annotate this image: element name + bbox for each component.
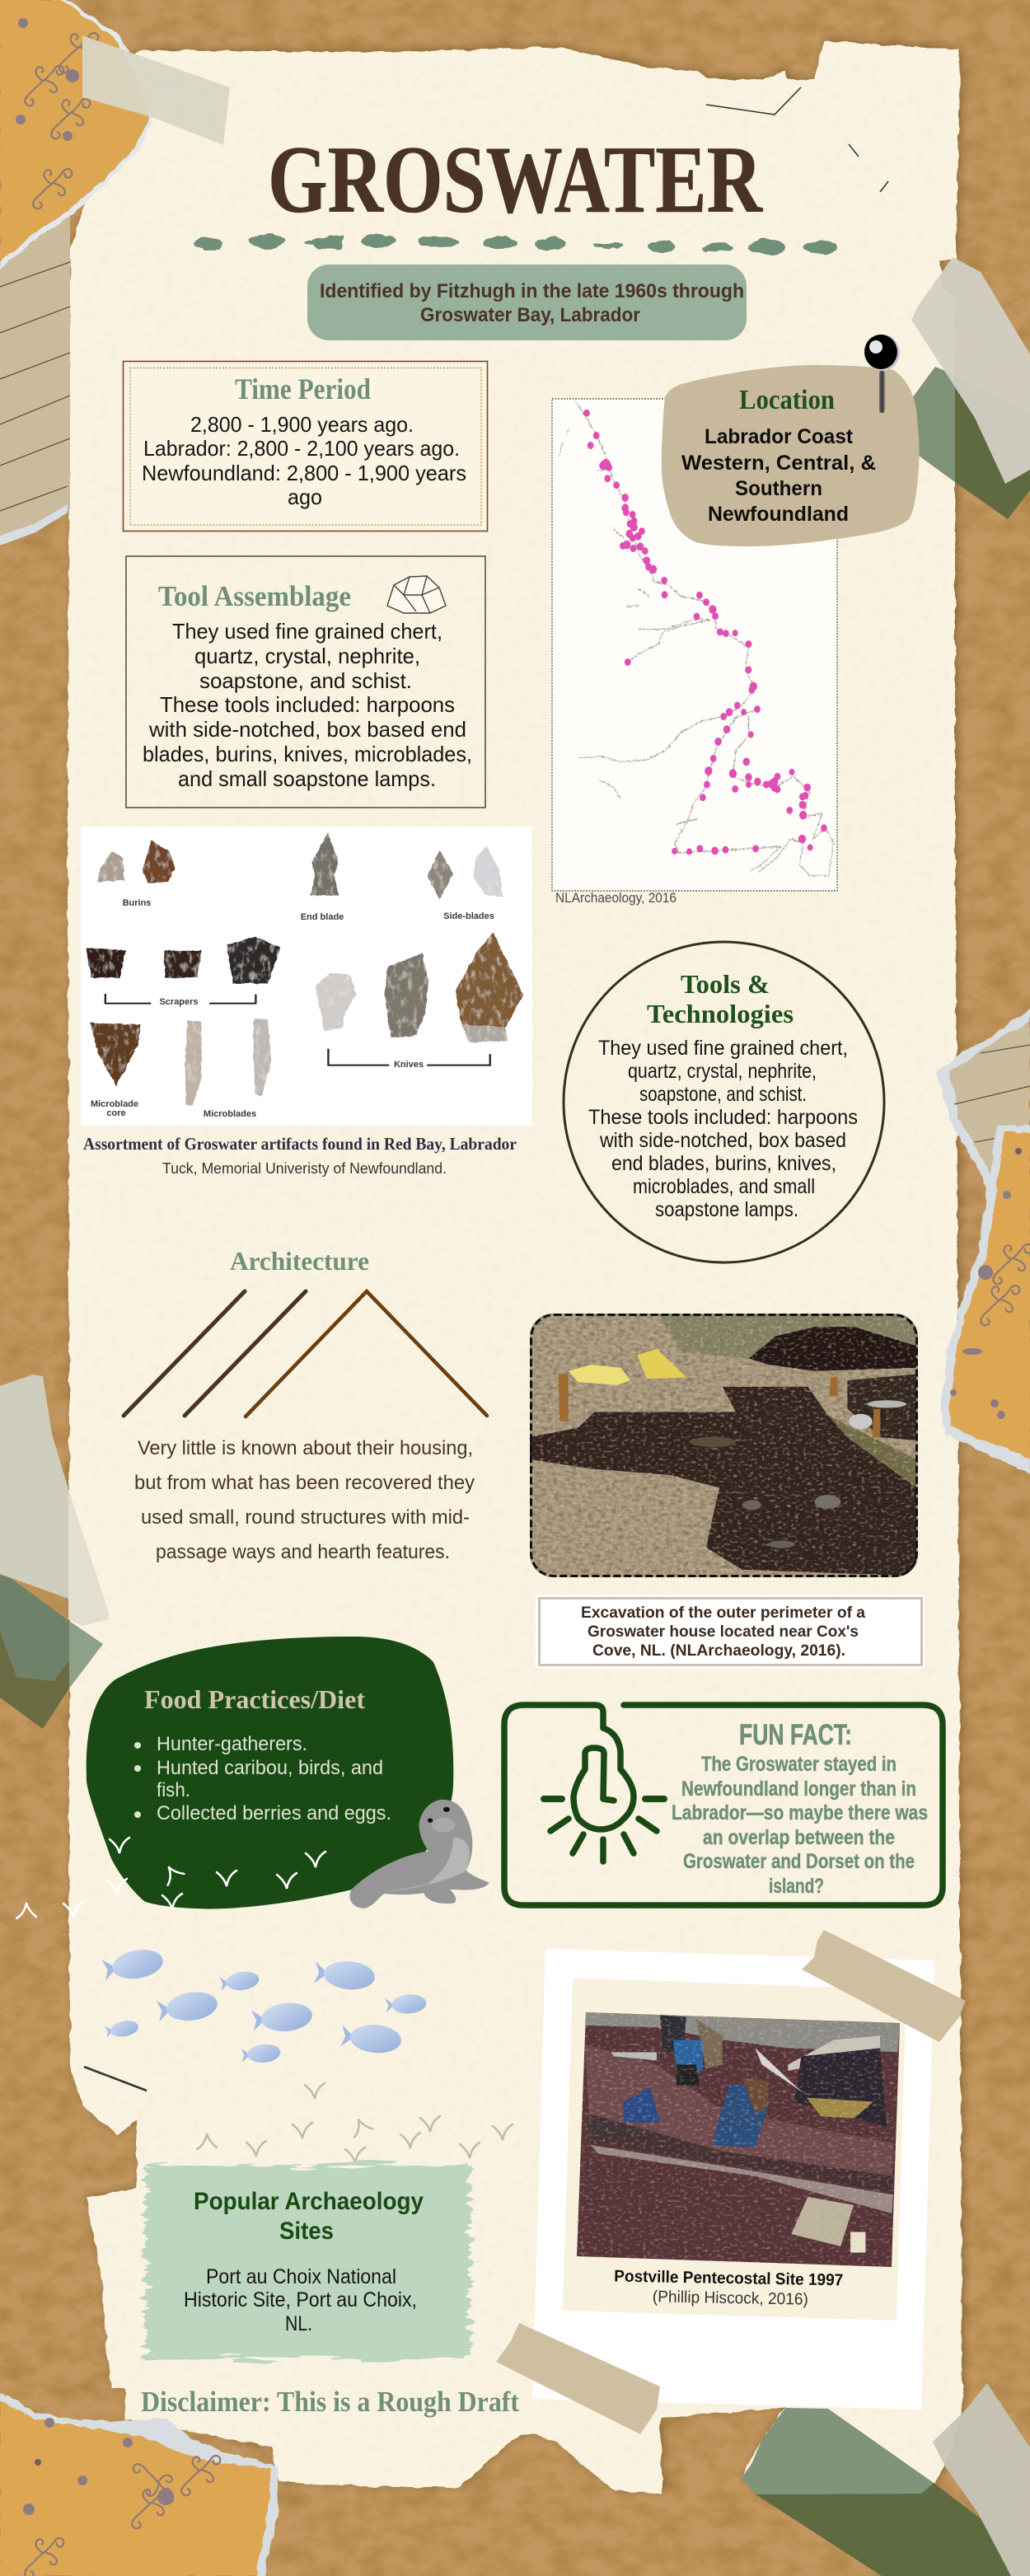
icon: house structure lines [124,1291,487,1417]
image: Groswater artifacts: core [106,1108,126,1118]
panel: tools and technologies circle: soapstone lamps. [655,1198,798,1221]
disclaimer: Disclaimer: This is a Rough Draft [141,2386,519,2418]
panel: tools and technologies circle: Technologies [647,999,794,1028]
panel: time period: Labrador: 2,800 - 2,100 years ago. [143,436,460,461]
panel: fun fact: The Groswater stayed in [701,1753,897,1776]
panel: time period: Newfoundland: 2,800 - 1,900 years [142,461,466,485]
green tape: bottom right [742,2408,1011,2576]
brush dash divider [194,234,837,255]
icon: map pin [864,335,900,413]
image: Groswater artifacts: Knives [394,1060,424,1070]
tape: polaroid top right [802,1930,966,2042]
panel: fun fact: FUN FACT: [739,1719,852,1751]
panel: tool assemblage: soapstone, and schist. [199,668,412,693]
panel: tools and technologies circle: end blades, burins, knives, [611,1152,836,1175]
tape: polaroid bottom left [496,2323,660,2434]
clear tape: bottom right [933,2383,1030,2576]
panel: fun fact [504,1705,943,1905]
panel: fun fact: Labrador—so maybe there was [672,1801,928,1824]
panel: food practices: Hunted caribou, birds, and [157,1757,383,1779]
panel: food practices: Food Practices/Diet [144,1684,365,1714]
text: architecture: but from what has been recovered they [134,1472,475,1494]
caption: excavation: Cove, NL. (NLArchaeology, 2016). [592,1642,845,1660]
panel: location: Western, Central, & [681,452,876,475]
clear tape: top right [911,257,1030,484]
lined beige scrap, top left [0,206,70,546]
banner: identified by Fitzhugh [307,265,747,340]
panel: tools and technologies circle: soapstone, and schist. [639,1083,807,1106]
title: GROSWATER [268,127,763,233]
tape: top left [82,35,230,145]
panel: tool assemblage: with side-notched, box based end [148,717,466,742]
panel: time period: ago [288,485,322,509]
panel: time period: 2,800 - 1,900 years ago. [190,412,414,437]
panel: location: Southern [735,477,822,500]
image: Groswater artifacts: End blade [301,912,344,922]
panel: fun fact: Newfoundland longer than in [681,1777,916,1801]
photo: excavation crew [571,2007,906,2271]
panel: popular archaeology sites: Popular Archaeology [194,2188,424,2215]
decorative tan birds [197,2083,513,2163]
banner: identified by Fitzhugh: Identified by Fitzhugh in the late 1960s through [320,280,744,302]
panel: tool assemblage: They used fine grained chert, [172,619,442,644]
panel: fun fact: an overlap between the [703,1826,895,1849]
image: Groswater artifacts: Scrapers [159,997,199,1007]
panel: food practices [87,1637,453,1909]
paper tear marks [84,87,888,2091]
panel: location: Labrador Coast [705,425,854,448]
green tape: left middle [0,1575,103,1729]
decorative fish school [101,1946,427,2064]
icon: seal [349,1800,489,1909]
panel: tools and technologies circle: They used fine grained chert, [598,1037,848,1060]
heading: architecture: Architecture [230,1246,369,1276]
orange patterned scrap, top left [0,0,154,269]
chart: site map: NLArchaeology, 2016 [555,890,677,906]
text: architecture [134,1437,475,1563]
panel: fun fact: Groswater and Dorset on the [683,1850,915,1873]
panel: time period: Time Period [235,372,371,405]
panel: time period [124,361,488,531]
panel: popular archaeology sites: Sites [279,2218,334,2245]
image: Groswater artifacts [81,827,532,1126]
decorative white birds [16,1838,325,1918]
caption: excavation: Groswater house located near Cox's [588,1623,859,1641]
panel: popular archaeology sites [145,2166,470,2358]
text: architecture: Very little is known about their housing, [138,1437,473,1459]
chart: site map [552,399,837,906]
polaroid: Postville Pentecostal site: (Phillip Hiscock, 2016) [653,2288,808,2309]
panel: popular archaeology sites: Historic Site, Port au Choix, [184,2288,417,2311]
banner: identified by Fitzhugh: Groswater Bay, Labrador [420,304,640,326]
orange patterned scrap, right [936,1008,1030,1474]
text: architecture: used small, round structures with mid- [141,1506,470,1529]
panel: location: Location [739,385,835,415]
panel: tool assemblage: quartz, crystal, nephrite, [194,644,420,668]
image: Groswater artifacts: Microblade [91,1099,138,1109]
panel: fun fact: island? [769,1875,824,1898]
panel: popular archaeology sites: NL. [285,2312,312,2335]
panel: tool assemblage: Tool Assemblage [158,580,351,612]
panel: tool assemblage: and small soapstone lamps. [178,766,436,791]
orange patterned scrap, bottom left [0,2391,279,2576]
panel: tools and technologies circle: Tools & [681,969,770,999]
panel: food practices: fish. [157,1779,190,1801]
caption: excavation: Excavation of the outer perimeter of a [581,1604,865,1622]
panel: tool assemblage: These tools included: harpoons [160,692,455,717]
panel: food practices: Hunter-gatherers. [157,1733,307,1755]
image: excavation photo [529,1314,918,1577]
panel: tools and technologies circle: microblades, and small [633,1175,815,1198]
panel: tools and technologies circle: quartz, crystal, nephrite, [628,1060,817,1083]
image: Groswater artifacts: Burins [123,898,151,908]
paper grain [76,58,949,2472]
image: Groswater artifacts: Side-blades [443,911,494,921]
panel: food practices: Collected berries and eggs. [157,1802,391,1824]
panel: tools and technologies circle [564,942,884,1262]
polaroid: Postville Pentecostal site: Postville Pentecostal Site 1997 [614,2268,843,2289]
panel: tools and technologies circle: These tools included: harpoons [588,1106,858,1129]
panel: tool assemblage: blades, burins, knives, microblades, [143,742,472,766]
icon: rock [387,576,446,613]
panel: location [662,365,920,546]
clear tape: left middle [0,1375,109,1626]
text: architecture: passage ways and hearth features. [156,1541,450,1563]
panel: popular archaeology sites: Port au Choix National [206,2265,396,2288]
caption: artifacts [83,1134,517,1177]
caption: artifacts: Tuck, Memorial Univeristy of Newfoundland. [162,1160,447,1177]
panel: location: Newfoundland [708,503,849,526]
polaroid: Postville Pentecostal site [532,1949,934,2410]
green tape: top right [912,367,1030,519]
caption: excavation [536,1595,925,1669]
image: Groswater artifacts: Microblades [204,1109,256,1119]
panel: tools and technologies circle: with side-notched, box based [599,1129,846,1152]
caption: artifacts: Assortment of Groswater artifacts found in Red Bay, Labrador [83,1134,517,1154]
panel: tool assemblage [126,556,485,808]
